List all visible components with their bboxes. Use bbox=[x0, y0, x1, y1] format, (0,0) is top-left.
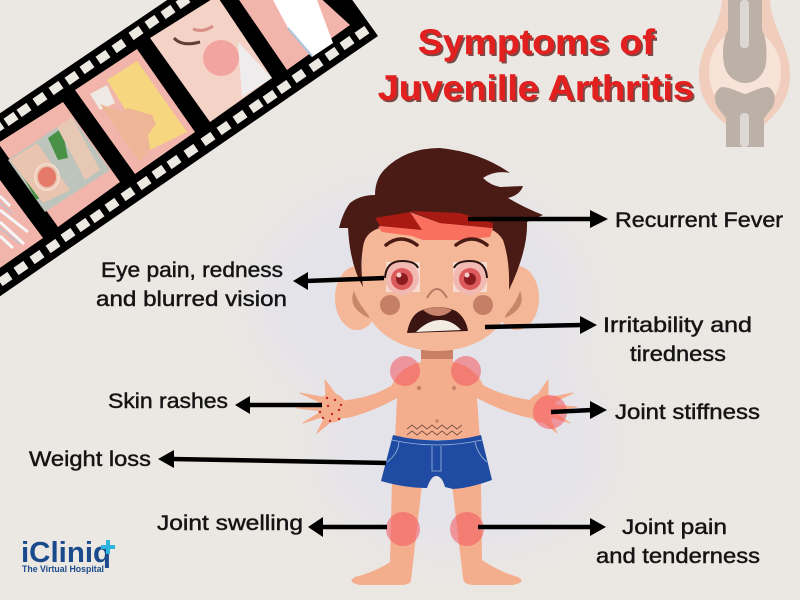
title: Symptoms of bbox=[418, 23, 655, 62]
mouth bbox=[407, 307, 468, 333]
film frame: baby photo bbox=[150, 0, 272, 122]
logo: iCliniq: iCliniq bbox=[21, 537, 111, 569]
ears bbox=[335, 266, 379, 330]
label: joint swelling: Joint swelling bbox=[157, 512, 303, 535]
film strip bbox=[0, 0, 378, 299]
title bbox=[378, 23, 696, 110]
label: weight loss: Weight loss bbox=[29, 448, 151, 471]
label: joint pain: and tenderness bbox=[596, 545, 760, 568]
logo: iCliniq: The Virtual Hospital bbox=[22, 564, 104, 575]
cheeks bbox=[380, 295, 400, 315]
label: recurrent fever: Recurrent Fever bbox=[615, 209, 783, 232]
label: eye pain bbox=[96, 259, 287, 311]
torso and arms bbox=[325, 350, 552, 440]
child illustration bbox=[297, 148, 577, 585]
arrow: recurrent fever bbox=[468, 210, 608, 228]
title: Symptoms of bbox=[420, 25, 657, 64]
fever band on hair bbox=[375, 211, 493, 230]
arrow: irritability bbox=[485, 316, 597, 334]
arrow: joint pain bbox=[478, 518, 606, 536]
arrow: skin rashes bbox=[235, 396, 322, 414]
forehead fever glow bbox=[378, 212, 493, 240]
ribs zigzag bbox=[407, 425, 462, 435]
legs bbox=[351, 480, 522, 585]
swollen joints bbox=[386, 356, 567, 546]
background lavender blob bbox=[250, 180, 615, 555]
nose bbox=[427, 289, 447, 298]
arrow: weight loss bbox=[158, 450, 386, 468]
left hand bbox=[297, 380, 346, 433]
neck shadow bbox=[421, 350, 453, 359]
film frame: hand photo bbox=[75, 49, 195, 174]
label: joint pain bbox=[596, 516, 760, 568]
skin rash dots bbox=[319, 397, 342, 422]
chest details bbox=[417, 386, 456, 423]
hair bbox=[339, 148, 543, 290]
arrow: joint stiffness bbox=[551, 401, 607, 419]
right hand bbox=[528, 380, 577, 433]
joint anatomy illustration bbox=[699, 0, 790, 147]
film frame: knee bone illustration bbox=[235, 0, 350, 70]
shorts bbox=[381, 435, 492, 489]
left eye bbox=[385, 261, 420, 295]
arrow: eye pain bbox=[293, 272, 384, 290]
right eye bbox=[453, 261, 487, 295]
label: eye pain: and blurred vision bbox=[96, 288, 287, 311]
title: Juvenille Arthritis bbox=[380, 71, 696, 110]
eyebrows bbox=[386, 239, 487, 245]
label: joint pain: Joint pain bbox=[622, 516, 727, 539]
label: skin rashes: Skin rashes bbox=[108, 390, 228, 413]
film sprocket holes bbox=[0, 0, 369, 286]
face bbox=[362, 225, 512, 351]
label: eye pain: Eye pain, redness bbox=[101, 259, 283, 282]
title: Juvenille Arthritis bbox=[378, 69, 694, 108]
film frame: skeleton hand bbox=[0, 176, 43, 270]
label: irritability: Irritability and bbox=[603, 314, 752, 337]
film frame: knee photo bbox=[0, 102, 120, 227]
label: joint stiffness: Joint stiffness bbox=[615, 401, 760, 424]
arrow: joint swelling bbox=[308, 517, 387, 537]
label: irritability bbox=[603, 314, 752, 366]
label: irritability: tiredness bbox=[630, 343, 726, 366]
